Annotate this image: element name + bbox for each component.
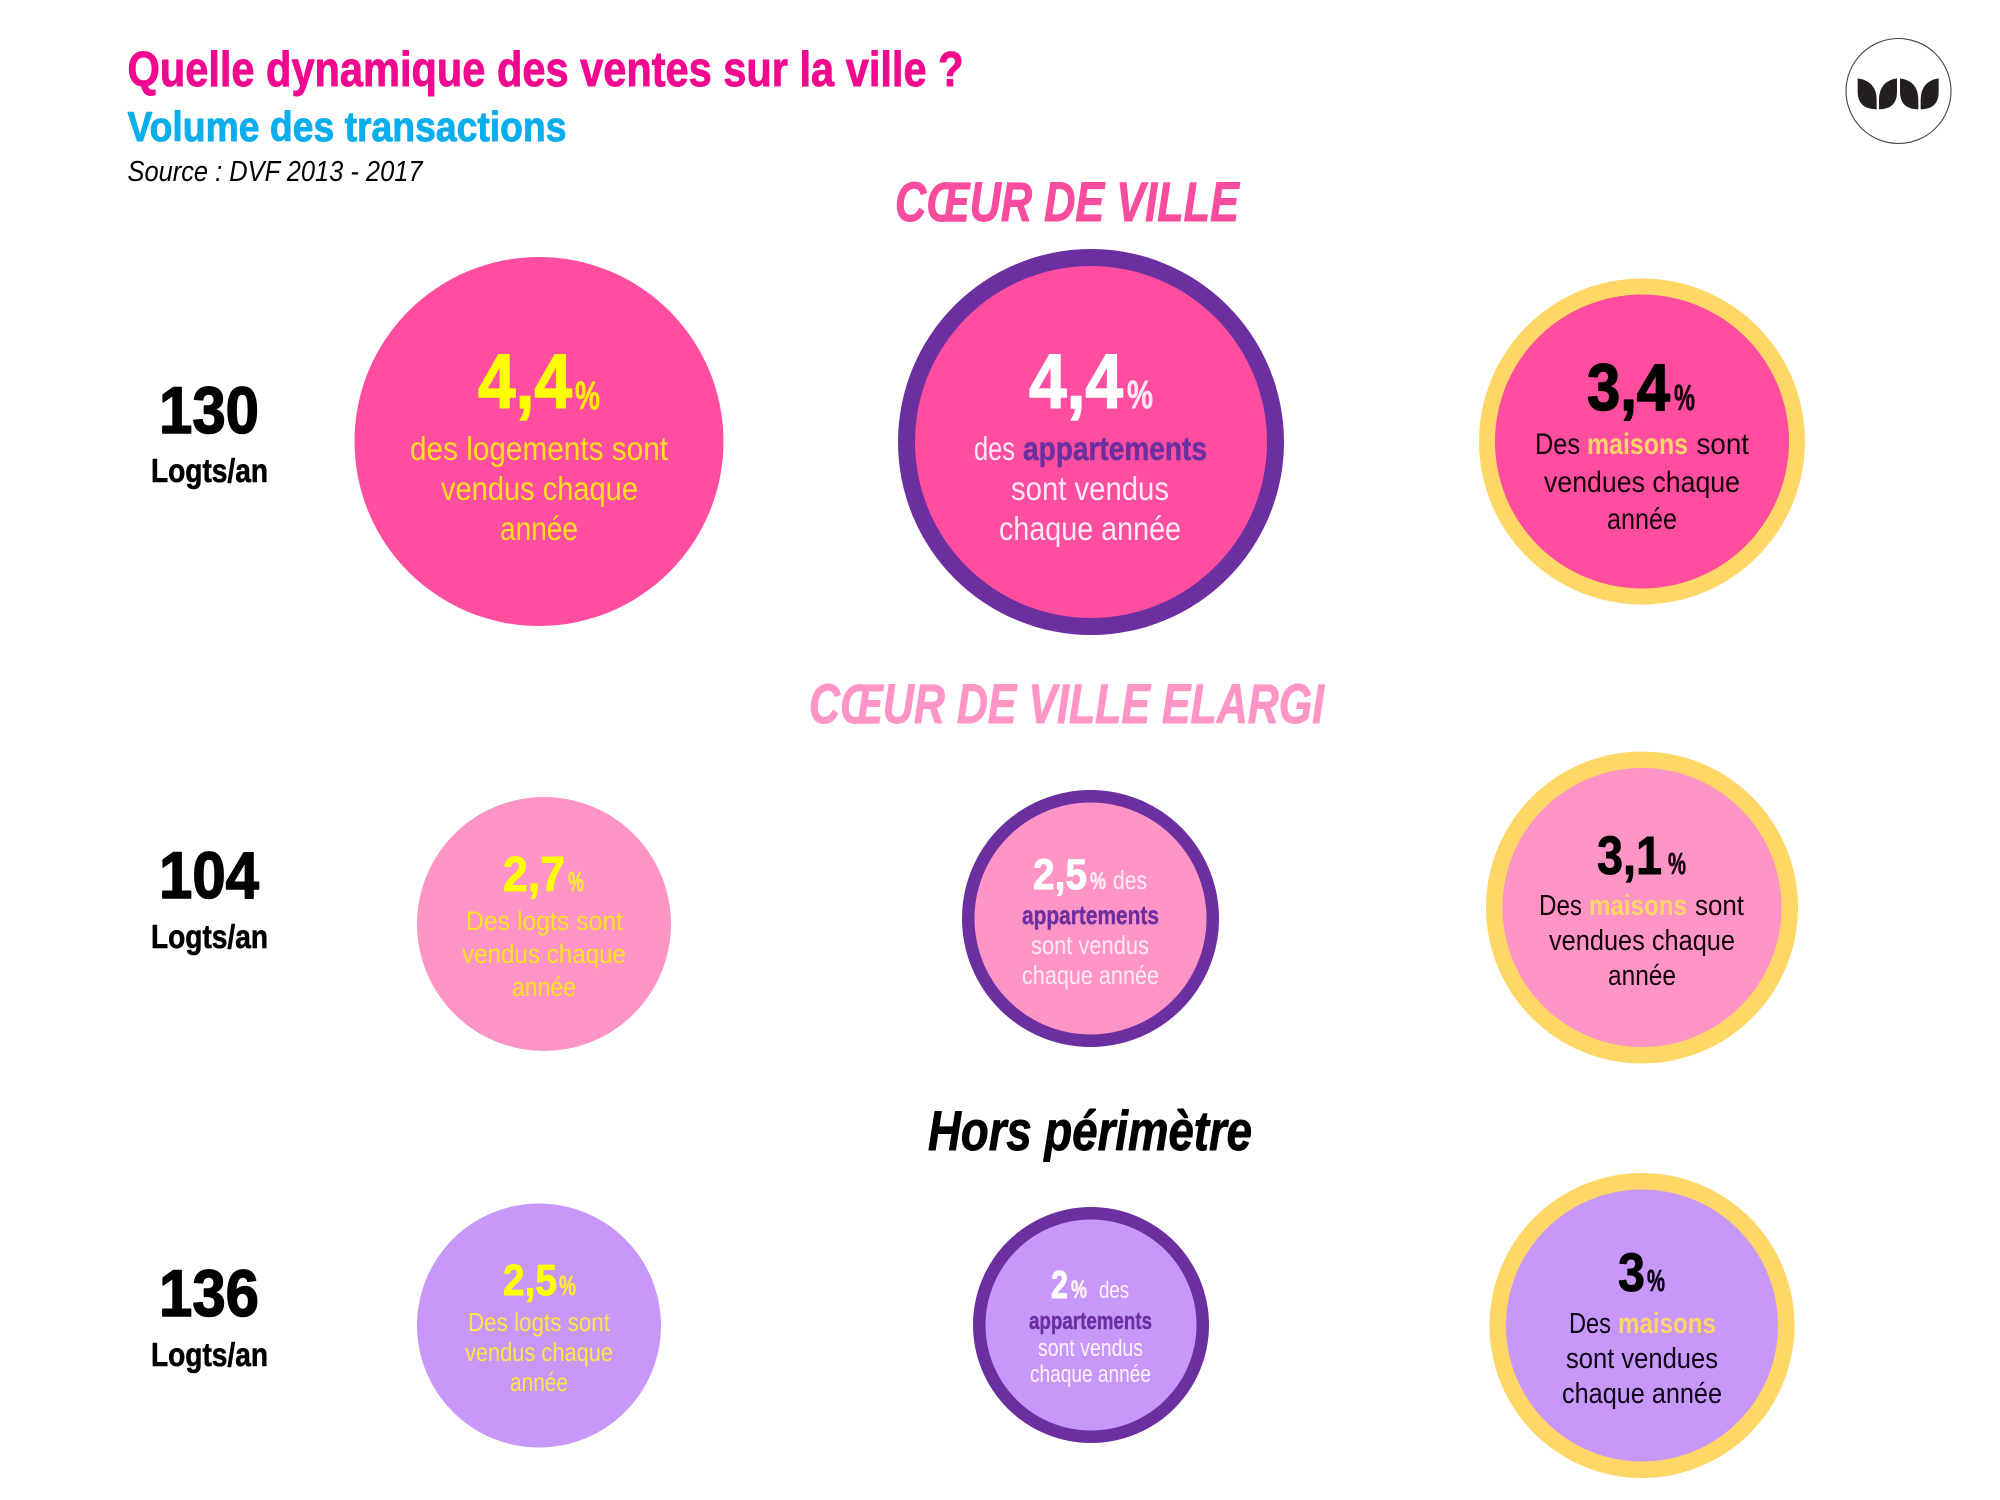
title: Quelle dynamique des ventes sur la ville ? xyxy=(128,43,964,97)
circle: coeur de ville logements: des logements sont xyxy=(410,430,668,467)
heading: coeur de ville elargi: CŒUR DE VILLE ELARGI xyxy=(809,672,1325,735)
circle: hors perimetre appartements: 2 xyxy=(1051,1264,1068,1307)
stat: coeur de ville logements per year xyxy=(151,373,268,489)
stat: coeur de ville logements per year: Logts/an xyxy=(151,452,268,489)
circle: elargi maisons xyxy=(1486,752,1798,1064)
stat: hors perimetre logements per year xyxy=(151,1256,268,1373)
circle: hors perimetre maisons xyxy=(1490,1173,1794,1478)
circle: coeur de ville appartements: chaque année xyxy=(999,510,1181,547)
circle: coeur de ville appartements: 4,4 xyxy=(1029,339,1123,425)
stat: elargi logements per year: Logts/an xyxy=(151,918,268,955)
circle: elargi maisons: % xyxy=(1668,846,1686,881)
source: Source : DVF 2013 - 2017 xyxy=(128,156,424,188)
circle: coeur de ville appartements: sont vendus xyxy=(1011,470,1169,507)
circle: coeur de ville maisons: 3,4 xyxy=(1587,350,1670,424)
circle: elargi maisons: sont xyxy=(1695,890,1744,922)
circle: coeur de ville maisons: Des xyxy=(1535,428,1580,461)
circle: elargi maisons: année xyxy=(1608,960,1676,992)
circle: hors perimetre logements: % xyxy=(559,1270,576,1301)
circle: hors perimetre logements: 2,5 xyxy=(503,1256,557,1305)
circle: elargi logements: Des logts sont xyxy=(466,906,623,936)
circle: elargi logements: 2,7 xyxy=(503,848,565,902)
stat: elargi logements per year xyxy=(151,838,268,955)
circle: coeur de ville maisons: sont xyxy=(1696,428,1750,461)
stat: elargi logements per year: 104 xyxy=(159,838,259,912)
circle: hors perimetre maisons: sont vendues xyxy=(1566,1343,1718,1375)
circle: coeur de ville appartements: % xyxy=(1127,373,1153,417)
circle: elargi logements xyxy=(417,797,671,1051)
circle: hors perimetre maisons: 3 xyxy=(1618,1243,1645,1303)
circle: elargi logements: vendus chaque xyxy=(462,939,626,969)
circle: hors perimetre appartements: sont vendus xyxy=(1038,1335,1143,1362)
circle: hors perimetre maisons: % xyxy=(1647,1263,1665,1298)
circle: elargi maisons: Des xyxy=(1539,890,1582,922)
circle: elargi maisons: maisons xyxy=(1589,890,1687,922)
circle: coeur de ville logements: 4,4 xyxy=(478,339,572,425)
circle: elargi appartements: % xyxy=(1090,868,1106,895)
circle: elargi appartements: des xyxy=(1113,865,1147,895)
circle: hors perimetre maisons: maisons xyxy=(1618,1308,1716,1340)
circle: elargi logements: % xyxy=(568,866,584,897)
circle: hors perimetre logements: vendus chaque xyxy=(465,1337,613,1367)
stat: hors perimetre logements per year: 136 xyxy=(159,1256,259,1330)
circle: hors perimetre appartements xyxy=(973,1207,1209,1443)
circle: coeur de ville logements: vendus chaque xyxy=(441,470,638,507)
circle: coeur de ville logements xyxy=(354,257,724,626)
circle: elargi appartements xyxy=(962,790,1219,1047)
circle: elargi logements: année xyxy=(512,972,576,1002)
circle: coeur de ville logements: année xyxy=(500,510,578,547)
circle: elargi appartements: appartements xyxy=(1022,900,1159,930)
circle: elargi maisons: 3,1 xyxy=(1597,826,1662,886)
circle: hors perimetre appartements: % xyxy=(1071,1276,1087,1304)
circle: coeur de ville logements: % xyxy=(575,374,600,418)
circle: hors perimetre maisons: Des xyxy=(1569,1308,1611,1340)
circle: hors perimetre logements: année xyxy=(510,1367,568,1397)
circle: elargi appartements: 2,5 xyxy=(1033,851,1087,899)
stat: coeur de ville logements per year: 130 xyxy=(159,373,259,447)
circle: elargi appartements: sont vendus xyxy=(1031,930,1149,960)
circle: hors perimetre appartements: chaque année xyxy=(1030,1361,1151,1388)
circle: coeur de ville appartements xyxy=(898,249,1284,635)
circle: hors perimetre logements: Des logts sont xyxy=(468,1307,611,1337)
circle: coeur de ville maisons xyxy=(1479,278,1805,604)
stat: hors perimetre logements per year: Logts/an xyxy=(151,1336,268,1373)
heading: hors perimetre: Hors périmètre xyxy=(928,1099,1252,1162)
heading: coeur de ville: CŒUR DE VILLE xyxy=(895,170,1240,233)
circle: hors perimetre appartements: appartements xyxy=(1029,1308,1152,1335)
circle: coeur de ville appartements: des xyxy=(974,430,1015,467)
circle: coeur de ville maisons: vendues chaque xyxy=(1544,466,1740,499)
circle: elargi appartements: chaque année xyxy=(1022,960,1159,990)
circle: coeur de ville appartements: appartements xyxy=(1023,430,1207,467)
circle: coeur de ville maisons: maisons xyxy=(1587,428,1688,461)
icon: logo xyxy=(1846,38,1951,144)
circle: hors perimetre maisons: chaque année xyxy=(1562,1378,1722,1410)
circle: coeur de ville maisons: année xyxy=(1607,503,1677,536)
subtitle: Volume des transactions xyxy=(128,103,566,150)
circle: coeur de ville maisons: % xyxy=(1674,377,1695,418)
circle: hors perimetre appartements: des xyxy=(1099,1277,1129,1304)
header xyxy=(128,43,964,188)
circle: hors perimetre logements xyxy=(417,1204,661,1448)
circle: elargi maisons: vendues chaque xyxy=(1549,925,1735,957)
